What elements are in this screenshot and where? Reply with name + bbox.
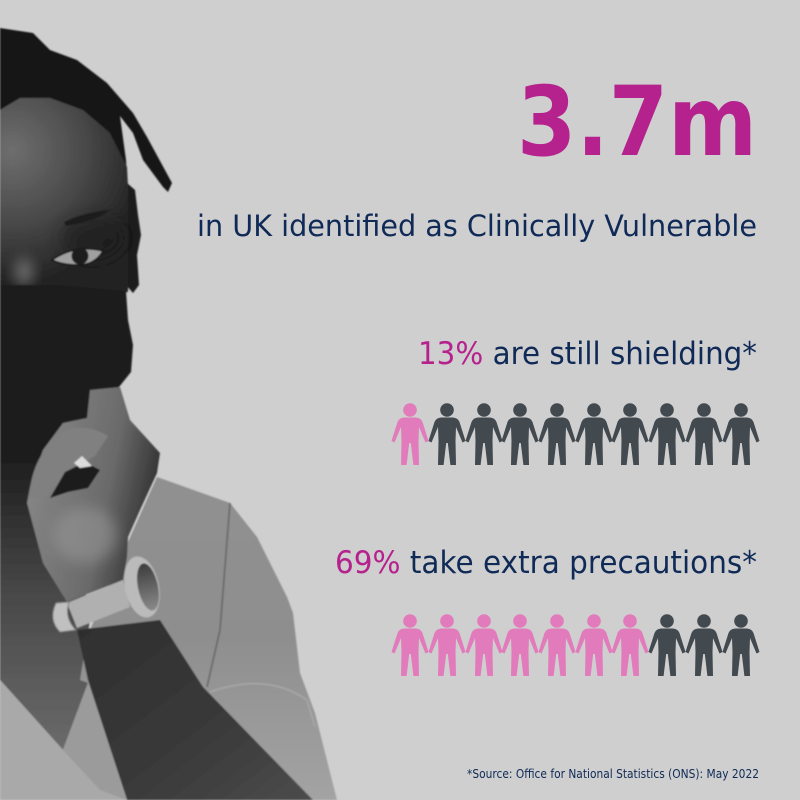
eye <box>52 248 106 276</box>
stat: extra precautions: 69% take extra precautions* <box>335 545 757 581</box>
subheading: in UK identified as Clinically Vulnerable <box>197 209 757 243</box>
forearm <box>77 620 313 800</box>
headline statistic: 3.7m <box>517 66 757 178</box>
wrist highlight <box>53 507 117 563</box>
nose highlight <box>15 258 33 286</box>
side braid <box>126 183 141 293</box>
lace neckline <box>0 680 127 800</box>
hand <box>27 387 160 602</box>
pictogram: 1 in 10 shielding <box>392 403 760 465</box>
face <box>0 98 128 292</box>
eye socket shadow <box>60 216 124 260</box>
stat: still shielding: 13% are still shielding* <box>418 336 757 372</box>
shirt <box>60 477 337 800</box>
source note: *Source: Office for National Statistics (ONS): May 2022 <box>467 767 759 781</box>
photo: woman wearing a face mask <box>0 28 337 800</box>
hair <box>0 28 172 200</box>
pictogram: 7 in 10 precautions <box>392 614 760 676</box>
neck and chest <box>0 440 90 750</box>
face mask <box>0 285 133 462</box>
eyebrow <box>64 210 110 226</box>
fingers <box>29 428 108 500</box>
watch <box>53 553 165 632</box>
